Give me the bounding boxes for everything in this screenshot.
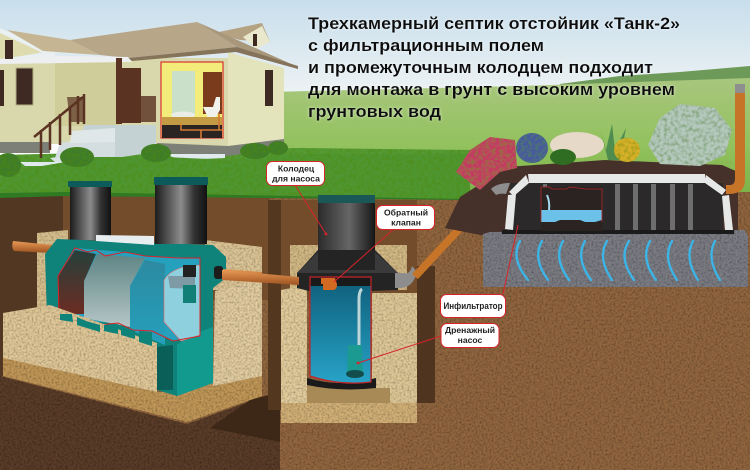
well: check valve — [321, 278, 337, 290]
well section — [222, 195, 417, 423]
house: stair railing — [34, 94, 84, 158]
callout: pump well — [266, 162, 327, 235]
well: outlet elbow — [395, 266, 417, 288]
well: hose — [359, 289, 362, 346]
house: door — [121, 68, 141, 123]
silver shrub — [648, 104, 732, 166]
title: для монтажа в грунт с высоким уровнем — [308, 80, 675, 99]
soil: well shaft back wall — [281, 200, 417, 300]
meadow — [270, 78, 750, 210]
flowers — [456, 104, 732, 190]
callout: drain pump: Дренажный — [445, 325, 495, 335]
ribs — [543, 184, 693, 231]
soil: ground cross-section — [0, 192, 750, 470]
white flowers — [550, 132, 604, 158]
well: right sand — [372, 293, 417, 403]
tank: riser left — [68, 181, 112, 240]
house: left windows — [16, 68, 33, 105]
callout: check valve: клапан — [391, 218, 421, 228]
house: side wall — [228, 52, 284, 154]
tank: body — [45, 239, 226, 396]
house: main roof — [70, 22, 237, 58]
house — [0, 22, 298, 166]
base bar — [502, 230, 734, 234]
title: Трехкамерный септик отстойник «Танк-2» — [308, 14, 680, 33]
well: water — [310, 277, 371, 383]
soil: deep dark ground — [0, 376, 280, 470]
callout: infiltrator — [440, 225, 518, 318]
house: porch post — [116, 58, 122, 124]
callout: drain pump: насос — [458, 335, 483, 345]
chamber 3 — [130, 260, 165, 345]
iris — [600, 124, 626, 160]
septic tank section — [3, 177, 262, 422]
house: porch base — [78, 125, 156, 158]
tank: left inlet pipe — [12, 241, 52, 253]
well: pump — [347, 345, 363, 376]
distant tree line — [560, 66, 750, 92]
orange pipe to infiltrator — [412, 189, 496, 279]
outlet riser pipe — [726, 84, 745, 194]
title: и промежуточным колодцем подходит — [308, 58, 653, 77]
tank: white plank — [96, 235, 154, 245]
gravel bed — [483, 230, 748, 287]
tank: sand front block — [3, 305, 157, 392]
soil: strip behind left sand — [268, 200, 281, 410]
callout: infiltrator: Инфильтратор — [444, 301, 503, 311]
house: left gable — [0, 33, 43, 60]
callout: drain pump — [357, 324, 499, 364]
house: gable fascia — [0, 28, 55, 64]
house: left roof — [7, 30, 100, 55]
callout: check valve — [334, 206, 434, 282]
green mound — [550, 149, 576, 165]
tank: riser right — [154, 177, 208, 244]
tank: teal ribs — [60, 314, 152, 346]
house: walkway — [20, 154, 225, 166]
soil: deep shadow next to well — [210, 392, 280, 442]
well: sand back — [290, 245, 407, 290]
well: cutaway outline — [310, 277, 371, 383]
tank: cutaway — [58, 248, 200, 345]
cutaway outline — [58, 248, 200, 341]
inner tube — [183, 265, 196, 277]
pink flowers — [456, 137, 517, 190]
seepage arrows — [516, 241, 720, 280]
infiltration field — [445, 84, 748, 287]
sky — [0, 0, 750, 96]
house: bathroom cutaway — [161, 62, 223, 138]
house: hip roof — [197, 22, 298, 67]
house: drain pipes — [181, 113, 222, 138]
house: eaves — [128, 47, 298, 69]
chamber 1 — [58, 250, 96, 314]
house: bathroom door — [203, 72, 222, 114]
callout: pump well: для насоса — [272, 174, 320, 184]
callout: pump well: Колодец — [278, 164, 315, 174]
well: pipe in — [222, 270, 299, 285]
house: main wall — [0, 58, 228, 152]
house: toilet — [203, 97, 220, 120]
mound — [445, 160, 738, 235]
inlet elbow — [491, 183, 510, 195]
title: грунтовых вод — [308, 102, 441, 121]
chamber 2 — [84, 254, 145, 327]
house: stone plinth — [0, 139, 284, 156]
yellow flowers — [614, 138, 640, 162]
well: bottom — [307, 378, 376, 389]
title — [308, 14, 680, 121]
callout: check valve: Обратный — [384, 208, 428, 218]
house: dormer roof — [214, 23, 270, 42]
infiltrator body — [502, 174, 734, 234]
grass edge — [0, 190, 470, 200]
house: porch railing — [122, 96, 156, 122]
tank: sand right back top — [205, 240, 262, 290]
house: shaded porch wall — [55, 62, 120, 128]
well: left sand — [281, 287, 307, 403]
house: basement — [162, 125, 222, 138]
title: с фильтрационным полем — [308, 36, 544, 55]
tank: gravel under base — [3, 358, 262, 422]
well: riser — [318, 195, 375, 260]
well: sand bottom — [281, 403, 417, 423]
front lawn — [0, 154, 470, 199]
bushes — [0, 141, 288, 177]
white frame — [505, 174, 733, 230]
house: dormer wall — [243, 26, 270, 49]
well: sand floor — [307, 385, 390, 403]
tank: sand back block — [37, 230, 68, 310]
soil: pit back wall — [63, 196, 270, 300]
well: cone — [297, 250, 398, 291]
soil: dark strip right of well — [417, 266, 435, 403]
lawn — [0, 148, 470, 205]
house: shower — [172, 71, 195, 114]
filter chamber — [164, 265, 200, 341]
blue flowers — [516, 133, 548, 163]
tank: right sand block — [213, 280, 262, 386]
tank: outlet pipe — [222, 269, 262, 282]
house: floor — [162, 117, 222, 125]
window into chamber — [541, 187, 602, 231]
filter media — [168, 276, 195, 289]
soil: pit left wall — [0, 192, 63, 376]
